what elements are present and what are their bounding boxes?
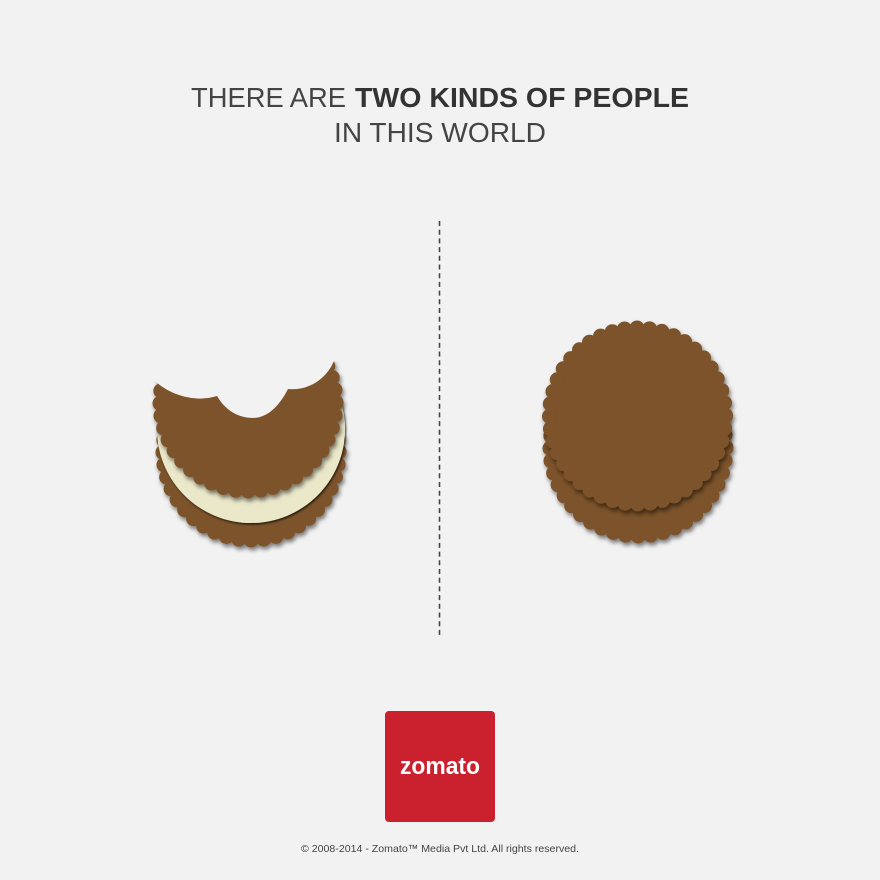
title — [191, 82, 689, 148]
bottom biscuit — [163, 364, 339, 540]
copyright footer: © 2008-2014 - Zomato™ Media Pvt Ltd. All rights reserved. — [301, 843, 579, 855]
bottom biscuit — [550, 360, 726, 536]
left illustration: bitten sandwich cookie — [157, 315, 345, 540]
zomato logo — [385, 711, 495, 822]
top biscuit — [550, 328, 726, 504]
logo tile — [385, 711, 495, 822]
logo wordmark: zomato — [400, 753, 480, 780]
infographic canvas — [151, 88, 738, 854]
title line 1 bold: TWO KINDS OF PEOPLE — [355, 82, 689, 113]
right illustration: whole cookie — [550, 328, 726, 536]
divider: dashed line — [438, 221, 440, 636]
title line 1 regular: THERE ARE — [191, 82, 346, 113]
title line 2: IN THIS WORLD — [334, 117, 546, 148]
cream filling — [156, 372, 348, 526]
top biscuit — [160, 315, 336, 491]
